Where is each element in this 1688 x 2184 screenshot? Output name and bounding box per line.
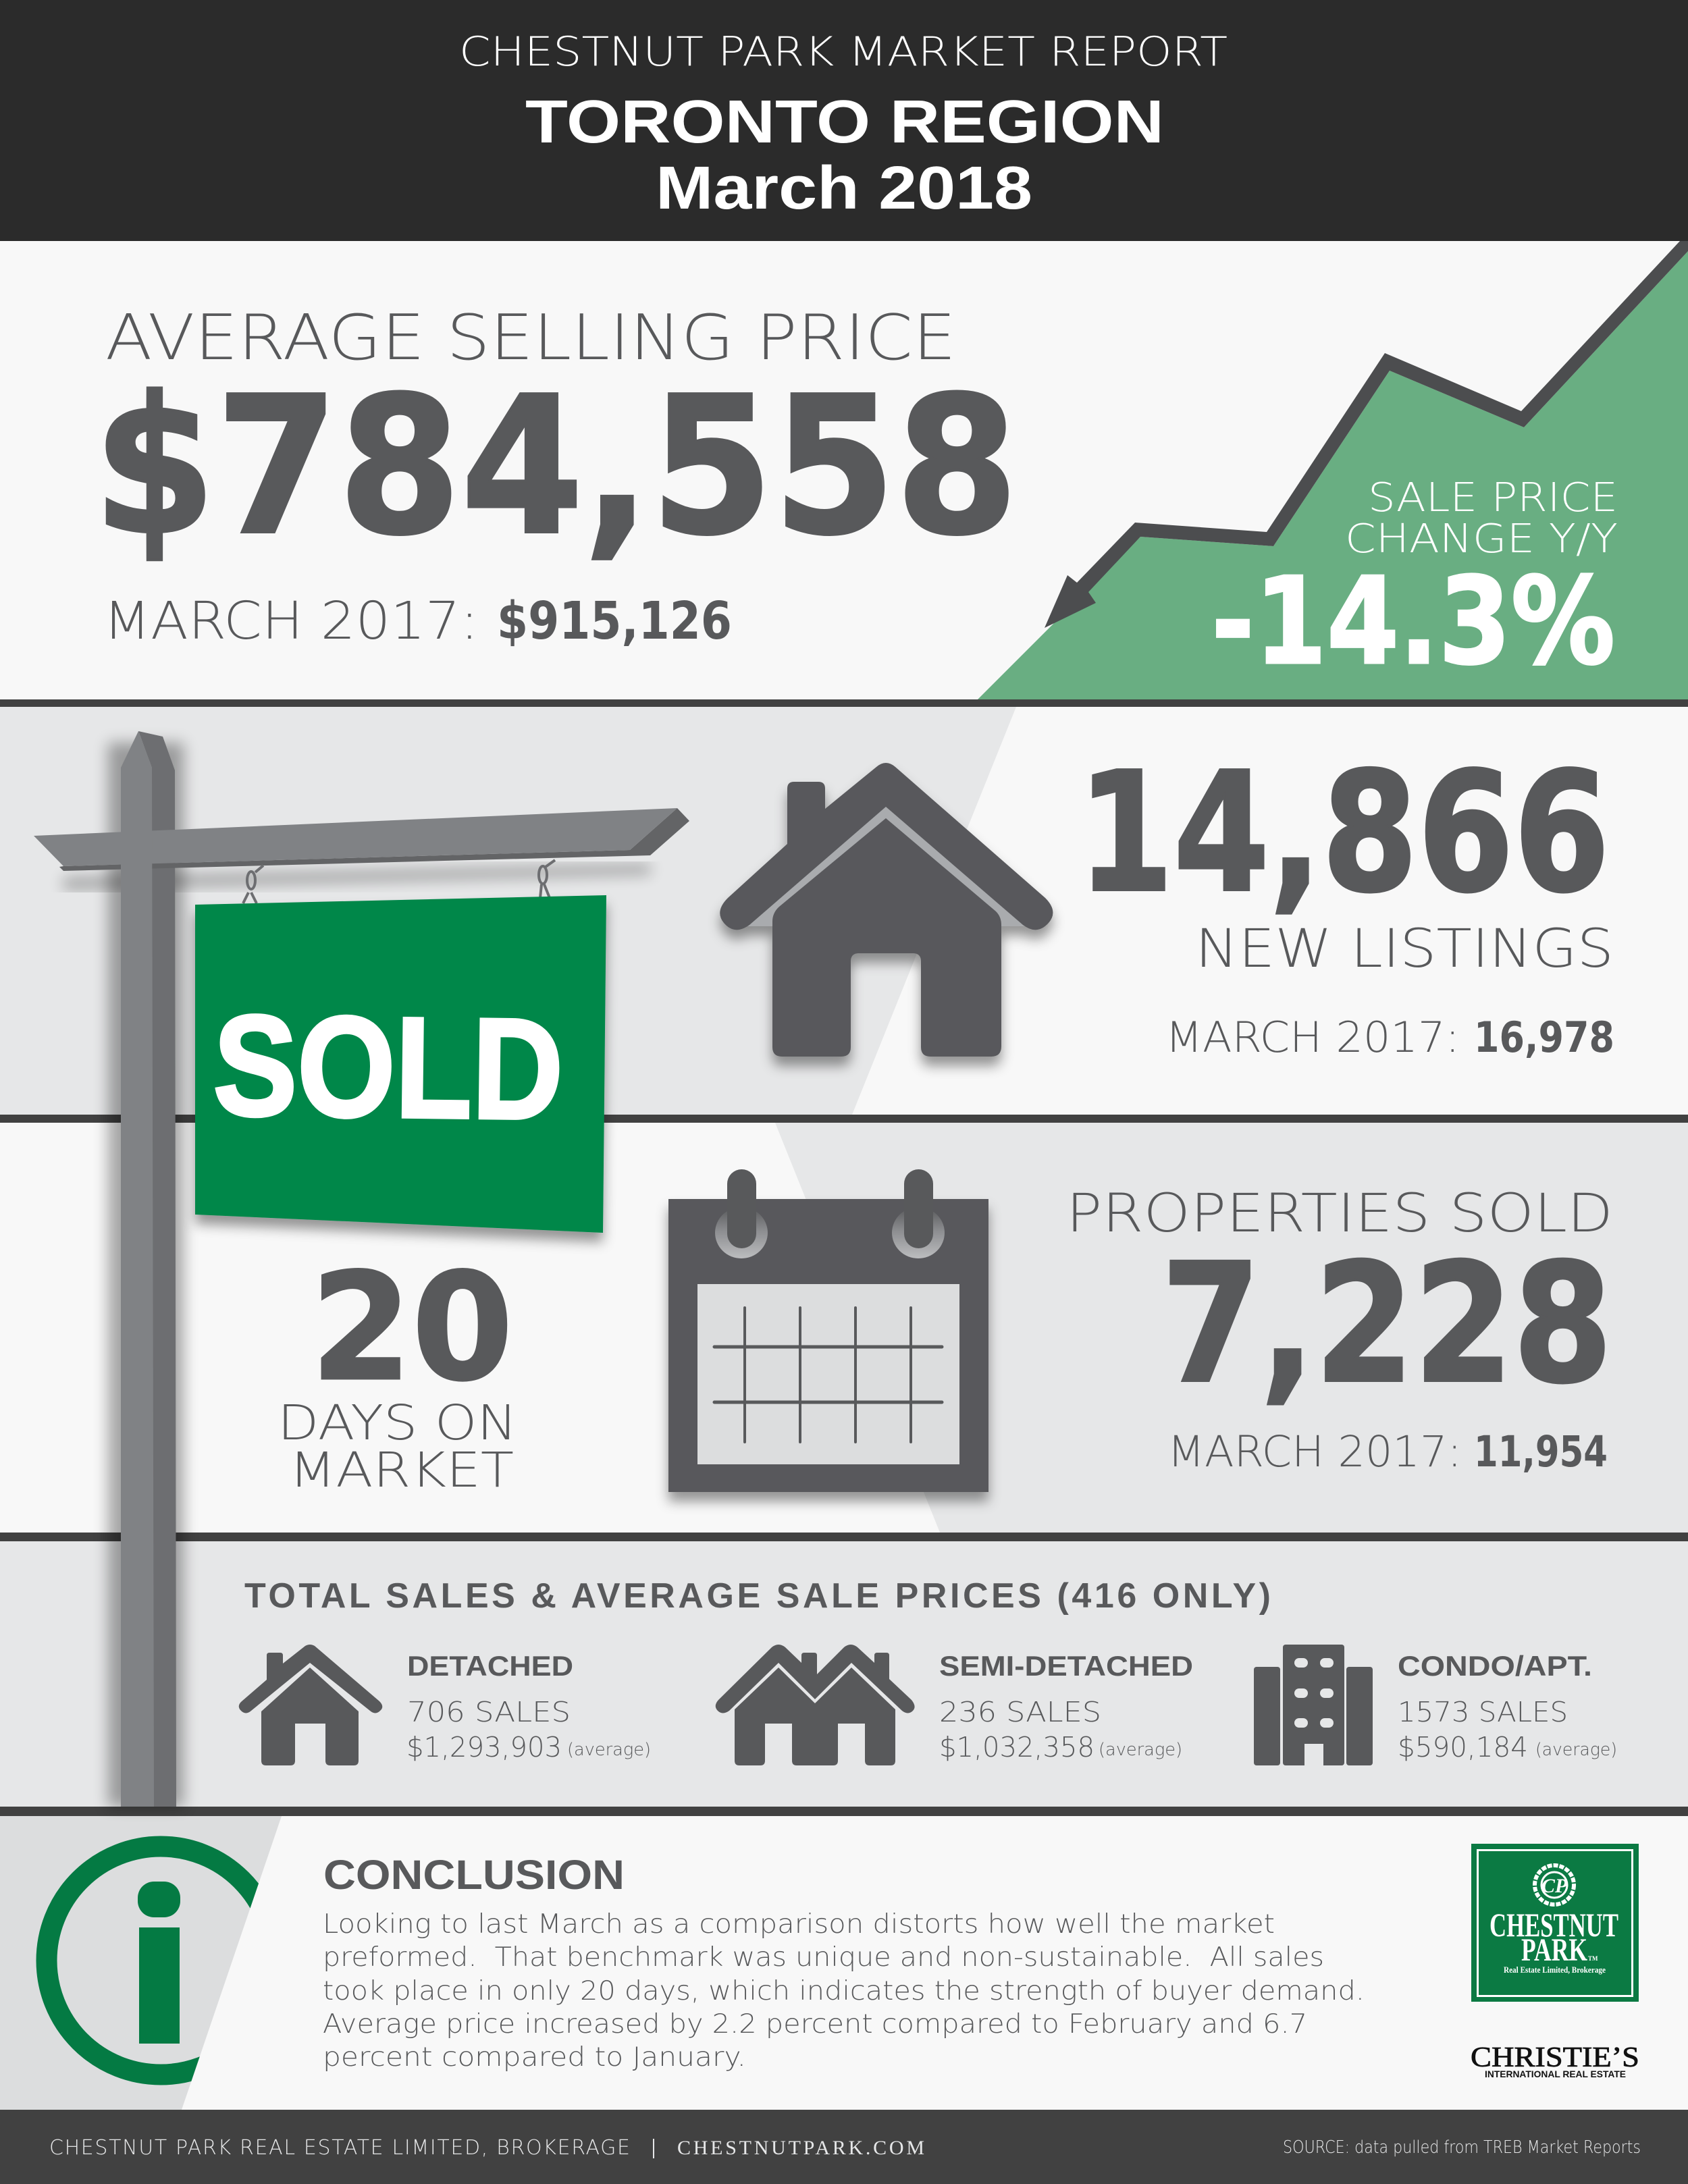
detached text: 706 SALES: [407, 1696, 571, 1728]
new listings text block: [1078, 737, 1614, 1062]
crossbar: [34, 808, 677, 866]
logo emblem: [1535, 1865, 1574, 1905]
semi-detached text: (average): [1099, 1740, 1182, 1760]
chart: green price change area with arrow: CHANGE Y/Y: [1345, 515, 1618, 562]
logo: Christie's: INTERNATIONAL REAL ESTATE: [1485, 2069, 1626, 2079]
condo text: 1573 SALES: [1398, 1696, 1568, 1728]
conclusion body: Looking to last March as a comparison distorts how well the market: [323, 1909, 1275, 1940]
conclusion text block: [323, 1852, 1365, 2073]
icon: semi-detached houses: [716, 1645, 915, 1765]
panel: average selling price: [0, 241, 1688, 699]
sign word SOLD: SOLD: [213, 985, 564, 1149]
prior year value: $915,126: [497, 591, 732, 651]
detached text: $1,293,903: [406, 1731, 562, 1763]
icon: calendar: [668, 1169, 988, 1492]
icon: information symbol: [47, 1846, 275, 2075]
sold number: 7,228: [1161, 1229, 1612, 1420]
semi-detached text: SEMI-DETACHED: [939, 1650, 1193, 1682]
detached text: [406, 1650, 651, 1763]
days on market text block: MARKET: [289, 1442, 514, 1498]
prior year label: MARCH 2017:: [103, 591, 479, 651]
post shadow: [108, 743, 184, 1807]
sold prior label: MARCH 2017:: [1167, 1427, 1462, 1476]
house roof: [720, 763, 1053, 930]
price heading: AVERAGE SELLING PRICE: [105, 301, 956, 374]
logo: Chestnut Park: [1471, 1844, 1639, 2002]
listings label: NEW LISTINGS: [1195, 919, 1614, 980]
sign chains: [243, 860, 555, 903]
header eyebrow: CHESTNUT PARK MARKET REPORT: [459, 28, 1228, 76]
conclusion heading: CONCLUSION: [323, 1852, 625, 1898]
semi-detached text: 236 SALES: [939, 1696, 1101, 1728]
condo text: [1398, 1650, 1617, 1763]
conclusion body: took place in only 20 days, which indicates the strength of buyer demand.: [323, 1976, 1365, 2006]
conclusion body: [323, 1909, 1365, 2073]
listings prior label: MARCH 2017:: [1165, 1013, 1460, 1062]
chart: green price change area with arrow: [978, 241, 1688, 699]
subtitle date: March 2018: [656, 155, 1032, 222]
logo emblem: CP: [1541, 1875, 1568, 1897]
logo wordmark: CHESTNUT: [1489, 1906, 1618, 1944]
footer website: CHESTNUTPARK.COM: [677, 2137, 924, 2159]
days on market text block: [278, 1242, 517, 1498]
logo: Chestnut Park: TM: [1588, 1955, 1598, 1962]
condo text: CONDO/APT.: [1398, 1650, 1592, 1682]
sold prior value: 11,954: [1474, 1427, 1608, 1476]
panel: total sales and prices: [239, 1576, 1617, 1765]
listings prior value: 16,978: [1474, 1013, 1614, 1062]
section heading: TOTAL SALES & AVERAGE SALE PRICES (416 ONLY): [244, 1576, 1271, 1616]
change label: SALE PRICE: [1368, 474, 1618, 521]
panel: conclusion band background: [0, 1816, 1688, 2110]
price value: $784,558: [93, 356, 1018, 577]
arrow line: [1045, 241, 1688, 628]
sold heading: PROPERTIES SOLD: [1066, 1183, 1613, 1244]
conclusion body: percent compared to January.: [323, 2042, 746, 2073]
panel: header band: [0, 0, 1688, 241]
title: TORONTO REGION: [525, 88, 1164, 156]
days label: DAYS ON: [278, 1395, 517, 1451]
icon: detached house: [239, 1645, 382, 1765]
panel: properties sold band: [0, 1123, 1688, 1533]
logo: Chestnut Park: Real Estate Limited, Brokerage: [1504, 1965, 1606, 1975]
conclusion body: preformed. That benchmark was unique and non-sustainable. All sales: [323, 1942, 1324, 1973]
post right face: [138, 731, 176, 1807]
footer divider: [653, 2139, 654, 2158]
semi-detached text: $1,032,358: [939, 1731, 1094, 1763]
panel: total sales band background: [0, 1541, 1688, 1807]
properties sold text block: [1066, 1183, 1613, 1476]
condo text: $590,184: [1398, 1731, 1528, 1763]
panel: new listings band: [0, 707, 1688, 1115]
condo text: (average): [1535, 1740, 1617, 1760]
footer company name: CHESTNUT PARK REAL ESTATE LIMITED, BROKERAGE: [49, 2136, 630, 2160]
detached text: DETACHED: [407, 1650, 573, 1682]
conclusion body: Average price increased by 2.2 percent compared to February and 6.7: [323, 2009, 1307, 2040]
logo: Christie's: CHRISTIE’S: [1471, 2042, 1639, 2073]
panel: footer: [0, 2110, 1688, 2184]
calendar rings: [715, 1207, 768, 1258]
change value: -14.3%: [1211, 552, 1615, 691]
house body: [772, 818, 1001, 1057]
green sign: [195, 895, 606, 1233]
crossbar underside: [59, 808, 689, 871]
days number: 20: [311, 1242, 513, 1414]
calendar page: [697, 1284, 959, 1464]
illustration: sign post with SOLD sign: [34, 731, 689, 1807]
detached text: (average): [567, 1740, 651, 1760]
semi-detached text: [939, 1650, 1193, 1763]
calendar grid: [714, 1308, 942, 1442]
icon: condo building: [1254, 1645, 1373, 1765]
logo: Chestnut Park: PARK: [1521, 1932, 1587, 1968]
crossbar shadow: [63, 864, 650, 890]
icon: big house: [720, 763, 1053, 1057]
post left face: [121, 731, 154, 1807]
